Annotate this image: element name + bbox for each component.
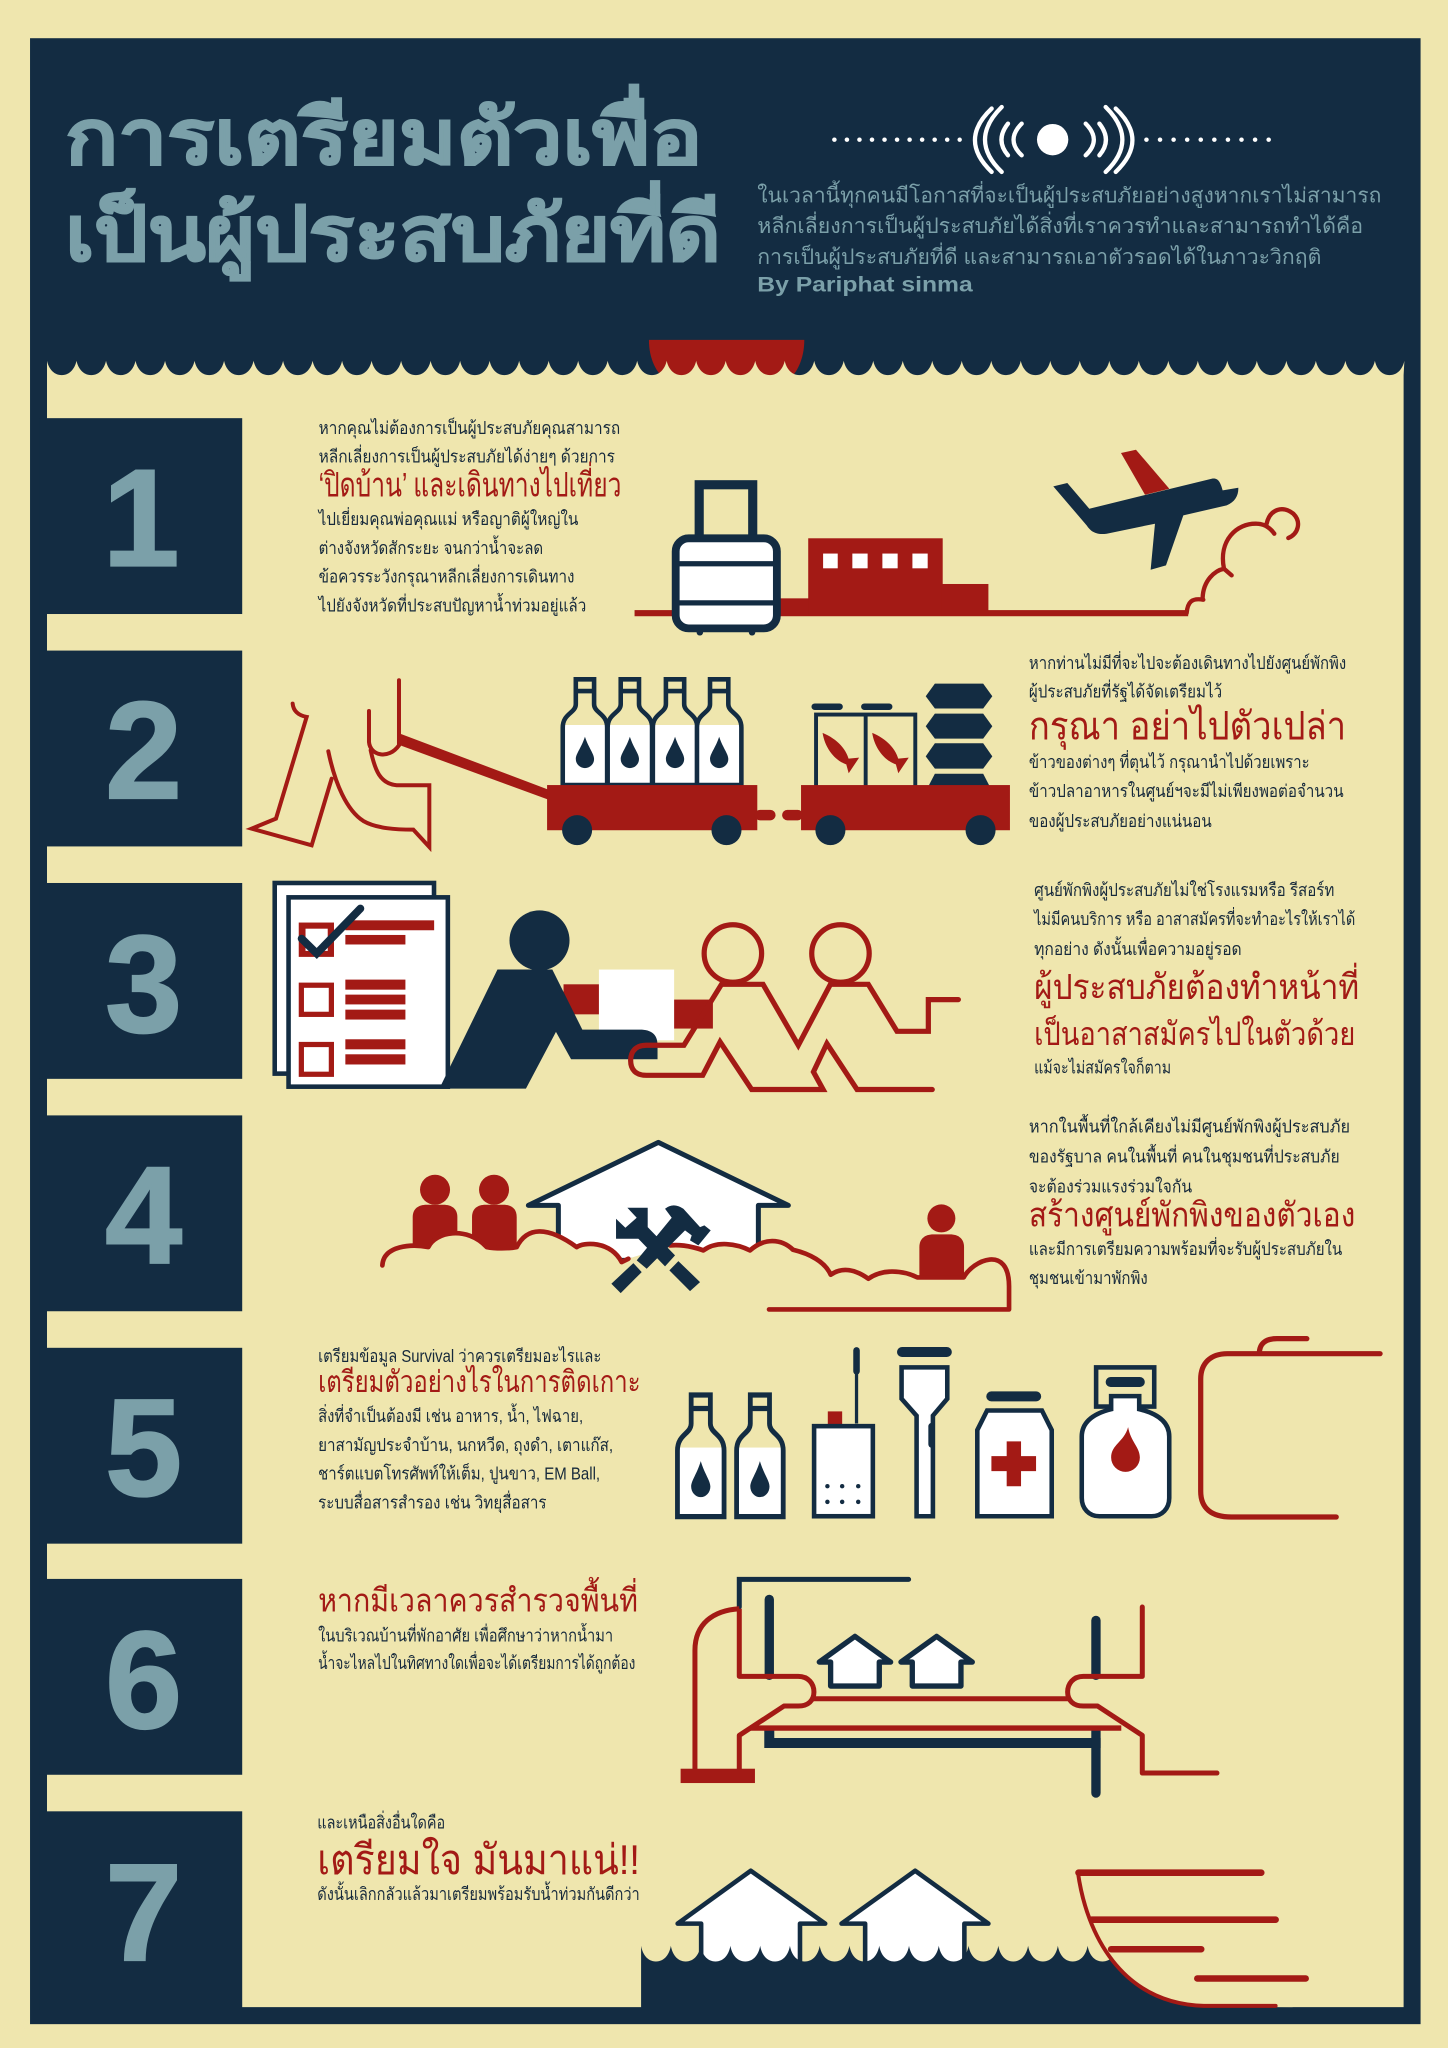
houses in flood [678, 1871, 988, 1965]
gas tank [1082, 1367, 1169, 1516]
content background with wave edge [47, 361, 1404, 2007]
number 2: 2 [105, 674, 182, 828]
number 2 [39, 651, 242, 846]
icon: airplane [1053, 450, 1238, 570]
text block 1: ไปยังจังหวัดที่ประสบปัญหาน้ำท่วมอยู่แล้ว [317, 592, 586, 616]
navy walls [739, 1579, 1101, 1793]
illustration: flood shelter [382, 1142, 1009, 1309]
text block 7: และเหนือสิ่งอื่นใดคือ [317, 1810, 445, 1832]
text block 6: หากมีเวลาควรสำรวจพื้นที่ [318, 1577, 638, 1619]
text block 3: ผู้ประสบภัยต้องทำหน้าที่ [1034, 963, 1359, 1008]
text block 3: ไม่มีคนบริการ หรือ อาสาสมัครที่จะทำอะไรให้เราได้ [1032, 907, 1355, 929]
text block 7: ดังนั้นเลิกกลัวแล้วมาเตรียมพร้อมรับน้ำท่วมกันดีกว่า [317, 1881, 640, 1904]
stacked food containers [926, 684, 992, 786]
first aid bottle [977, 1391, 1052, 1516]
intro text: By Pariphat sinma [757, 274, 973, 297]
text block 1: ไปเยี่ยมคุณพ่อคุณแม่ หรือญาติผู้ใหญ่ใน [317, 507, 578, 530]
number 7 [39, 1811, 242, 2010]
number 3: 3 [105, 908, 182, 1062]
text block 6: ในบริเวณบ้านที่พักอาศัย เพื่อศึกษาว่าหากน้ำมา [318, 1623, 613, 1646]
text block 2 [1029, 651, 1346, 832]
flood water fill [382, 1231, 1009, 1309]
number 6 [39, 1579, 242, 1775]
cloud line [1187, 509, 1298, 613]
text block 6 [318, 1577, 638, 1674]
icon: signal broadcast [834, 107, 1273, 172]
illustration: walking legs pulling [252, 680, 548, 847]
intro text [757, 181, 1381, 297]
number 4 [39, 1115, 242, 1311]
flood water [641, 1873, 1293, 2008]
radio [814, 1349, 873, 1516]
illustration: ship on water line [635, 538, 1188, 616]
text block 1: หลีกเลี่ยงการเป็นผู้ประสบภัยได้ง่ายๆ ด้วยการ [319, 445, 615, 468]
boat bow outline [1078, 1873, 1306, 2006]
text block 4: ชุมชนเข้ามาพักพิง [1029, 1268, 1148, 1289]
text block 5: เตรียมตัวอย่างไรในการติดเกาะ [318, 1364, 641, 1399]
red bars and white sheet [564, 970, 713, 1040]
text block 4: จะต้องร่วมแรงร่วมใจกัน [1029, 1176, 1192, 1196]
small houses [819, 1636, 972, 1686]
number 7: 7 [105, 1836, 182, 1990]
text block 4: และมีการเตรียมความพร้อมที่จะรับผู้ประสบภัยใน [1029, 1237, 1342, 1260]
section 1 [39, 417, 1298, 636]
checklist documents [275, 883, 448, 1087]
text block 5: ยาสามัญประจำบ้าน, นกหวีด, ถุงดำ, เตาแก๊ส, [318, 1435, 613, 1456]
text block 5: ชาร์ตแบตโทรศัพท์ให้เต็ม, ปูนขาว, EM Ball, [318, 1463, 600, 1485]
text block 6: น้ำจะไหลไปในทิศทางใดเพื่อจะได้เตรียมการได้ถูกต้อง [318, 1650, 635, 1674]
text block 1: ต่างจังหวัดสักระยะ จนกว่าน้ำจะลด [319, 535, 543, 558]
text block 1 [317, 417, 622, 616]
number 6: 6 [105, 1604, 182, 1758]
water bottles [677, 1395, 783, 1517]
number 4: 4 [105, 1139, 182, 1293]
number 1 [39, 418, 242, 614]
section 7 [39, 1810, 1306, 2010]
text block 2: ของผู้ประสบภัยอย่างแน่นอน [1029, 811, 1212, 832]
title: เป็นผู้ประสบภัยที่ดี [65, 180, 721, 281]
section 4 [39, 1113, 1355, 1311]
text block 4: สร้างศูนย์พักพิงของตัวเอง [1029, 1196, 1355, 1235]
text block 3: ศูนย์พักพิงผู้ประสบภัยไม่ใช่โรงแรมหรือ รีสอร์ท [1034, 880, 1334, 901]
text block 5: สิ่งที่จำเป็นต้องมี เช่น อาหาร, น้ำ, ไฟฉาย, [318, 1403, 583, 1426]
intro text: ในเวลานี้ทุกคนมีโอกาสที่จะเป็นผู้ประสบภัยอย่างสูงหากเราไม่สามารถ [757, 181, 1381, 209]
text block 2: กรุณา อย่าไปตัวเปล่า [1029, 704, 1346, 750]
text block 2: หากท่านไม่มีที่จะไปจะต้องเดินทางไปยังศูนย์พักพิง [1029, 651, 1346, 674]
section 3 [39, 880, 1359, 1090]
text block 4: หากในพื้นที่ใกล้เคียงไม่มีศูนย์พักพิงผู้ประสบภัย [1029, 1113, 1350, 1137]
text block 3 [1032, 880, 1359, 1078]
text block 4: ของรัฐบาล คนในพื้นที่ คนในชุมชนที่ประสบภัย [1029, 1143, 1340, 1167]
text block 5: เตรียมข้อมูล Survival ว่าควรเตรียมอะไรและ [318, 1346, 601, 1367]
flashlight [897, 1347, 952, 1516]
section 2 [39, 651, 1346, 847]
intro text: หลีกเลี่ยงการเป็นผู้ประสบภัยได้สิ่งที่เราควรทำและสามารถทำได้คือ [757, 211, 1363, 239]
red bucket at waterline [649, 340, 804, 379]
icon: crossed hammer and wrench [611, 1205, 711, 1293]
flood water lines [382, 1231, 1009, 1309]
number 1: 1 [103, 442, 179, 596]
intro text: การเป็นผู้ประสบภัยที่ดี และสามารถเอาตัวรอดได้ในภาวะวิกฤติ [757, 242, 1321, 270]
bottles on cart [563, 679, 741, 785]
text block 5 [318, 1346, 641, 1513]
text block 1: ‘ปิดบ้าน’ และเดินทางไปเที่ยว [319, 462, 622, 505]
section 6 [39, 1577, 1217, 1793]
section 5 [39, 1339, 1380, 1544]
red base bar [681, 1769, 755, 1783]
text block 2: ข้าวของต่างๆ ที่ตุนไว้ กรุณานำไปด้วยเพราะ [1029, 750, 1310, 773]
title: การเตรียมตัวเพื่อ [65, 84, 702, 181]
illustration: site survey plan [681, 1579, 1217, 1793]
header panel [65, 84, 1381, 297]
red outlined people [631, 925, 958, 1090]
red people [413, 1175, 964, 1287]
text block 4 [1029, 1113, 1355, 1289]
icon: suitcase [674, 485, 778, 636]
house [528, 1142, 788, 1260]
red boat outline [1201, 1339, 1380, 1517]
text block 5: ระบบสื่อสารสำรอง เช่น วิทยุสื่อสาร [318, 1490, 547, 1513]
number 5 [39, 1348, 242, 1544]
person navy [439, 910, 658, 1089]
red water channels [695, 1607, 1217, 1773]
carts [547, 785, 1010, 845]
text block 3: ทุกอย่าง ดังนั้นเพื่อความอยู่รอด [1034, 936, 1242, 960]
text block 7 [317, 1810, 640, 1904]
number 5: 5 [105, 1371, 182, 1525]
text block 2: ผู้ประสบภัยที่รัฐได้จัดเตรียมไว้ [1029, 680, 1222, 703]
number 3 [39, 883, 242, 1079]
text block 3: แม้จะไม่สมัครใจก็ตาม [1034, 1057, 1171, 1078]
title [65, 84, 721, 281]
text block 1: หากคุณไม่ต้องการเป็นผู้ประสบภัยคุณสามารถ [319, 417, 620, 439]
text block 1: ข้อควรระวังกรุณาหลีกเลี่ยงการเดินทาง [319, 565, 574, 588]
text block 2: ข้าวปลาอาหารในศูนย์ฯจะมีไม่เพียงพอต่อจำนวน [1029, 781, 1344, 802]
cabinet with fish [815, 707, 915, 788]
text block 3: เป็นอาสาสมัครไปในตัวด้วย [1034, 1015, 1355, 1052]
text block 7: เตรียมใจ มันมาแน่!! [317, 1836, 640, 1883]
